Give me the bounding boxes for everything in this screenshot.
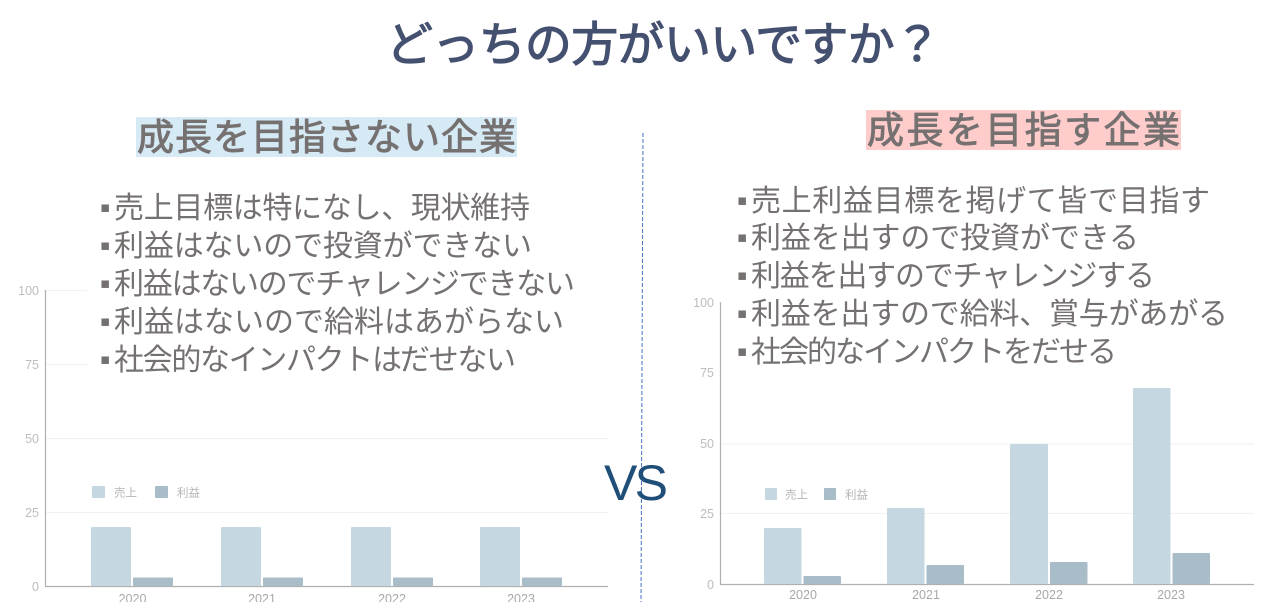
text block: right bullet list: 利益を出すので投資ができる (751, 222, 1139, 255)
panel: left bar chart: 50 (25, 432, 39, 446)
text block: right bullet list (737, 185, 1228, 369)
text block: right bullet list: 売上利益目標を掲げて皆で目指す (751, 185, 1210, 218)
text block: left bullet list: ▪ (100, 312, 110, 330)
text block: right bullet list: 利益を出すのでチャレンジする (751, 260, 1155, 293)
title: どっちの方がいいですか？ (386, 18, 941, 71)
text block: right bullet list: ▪ (737, 304, 747, 322)
panel: right bar chart: 25 (700, 507, 714, 521)
text block: left bullet list: ▪ (100, 236, 110, 254)
text block: right bullet list: ▪ (737, 342, 747, 360)
panel: right bar chart: 2022 (1035, 588, 1063, 602)
panel: left bar chart: 75 (25, 358, 39, 372)
text block: left bullet list (100, 192, 575, 377)
text block: left bullet list: ▪ (100, 274, 110, 292)
text block: left bullet list: ▪ (100, 198, 110, 216)
text block: right bullet list: ▪ (737, 266, 747, 284)
panel: right bar chart: 75 (700, 366, 714, 380)
text block: left bullet list: 社会的なインパクトはだせない (114, 344, 516, 377)
text block: right bullet list: 利益を出すので給料、賞与があがる (751, 298, 1228, 331)
panel: right bar chart: 利益 (845, 488, 868, 502)
panel: left bar chart (18, 284, 608, 602)
panel: left bar chart: 利益 (177, 486, 200, 500)
text block: left bullet list: 売上目標は特になし、現状維持 (114, 192, 530, 225)
panel: right bar chart: 2023 (1157, 588, 1185, 602)
panel: right bar chart: 売上 (785, 488, 808, 502)
panel: left bar chart: 25 (25, 506, 39, 520)
text block: left bullet list: 利益はないのでチャレンジできない (114, 268, 575, 301)
panel: left bar chart: 0 (32, 580, 39, 594)
divider (641, 133, 643, 602)
panel: right heading: 成長を目指す企業 (867, 110, 1180, 151)
panel: right bar chart: 50 (700, 437, 714, 451)
panel: left heading: 成長を目指さない企業 (137, 117, 516, 158)
panel: left bar chart: 売上 (114, 486, 137, 500)
text block: left bullet list: 利益はないので給料はあがらない (114, 306, 564, 339)
panel: right bar chart: 0 (707, 578, 714, 592)
text block: left bullet list: ▪ (100, 350, 110, 368)
text block: right bullet list: 社会的なインパクトをだせる (751, 336, 1117, 369)
text block: left bullet list: 利益はないので投資ができない (114, 230, 532, 263)
VS label: VS (604, 455, 668, 511)
panel: right bar chart: 2021 (912, 588, 940, 602)
text block: right bullet list: ▪ (737, 191, 747, 209)
panel: right bar chart (693, 296, 1254, 602)
panel: right bar chart: 100 (693, 296, 714, 310)
text block: right bullet list: ▪ (737, 228, 747, 246)
panel: left bar chart: 100 (18, 284, 39, 298)
panel: right bar chart: 2020 (789, 588, 817, 602)
